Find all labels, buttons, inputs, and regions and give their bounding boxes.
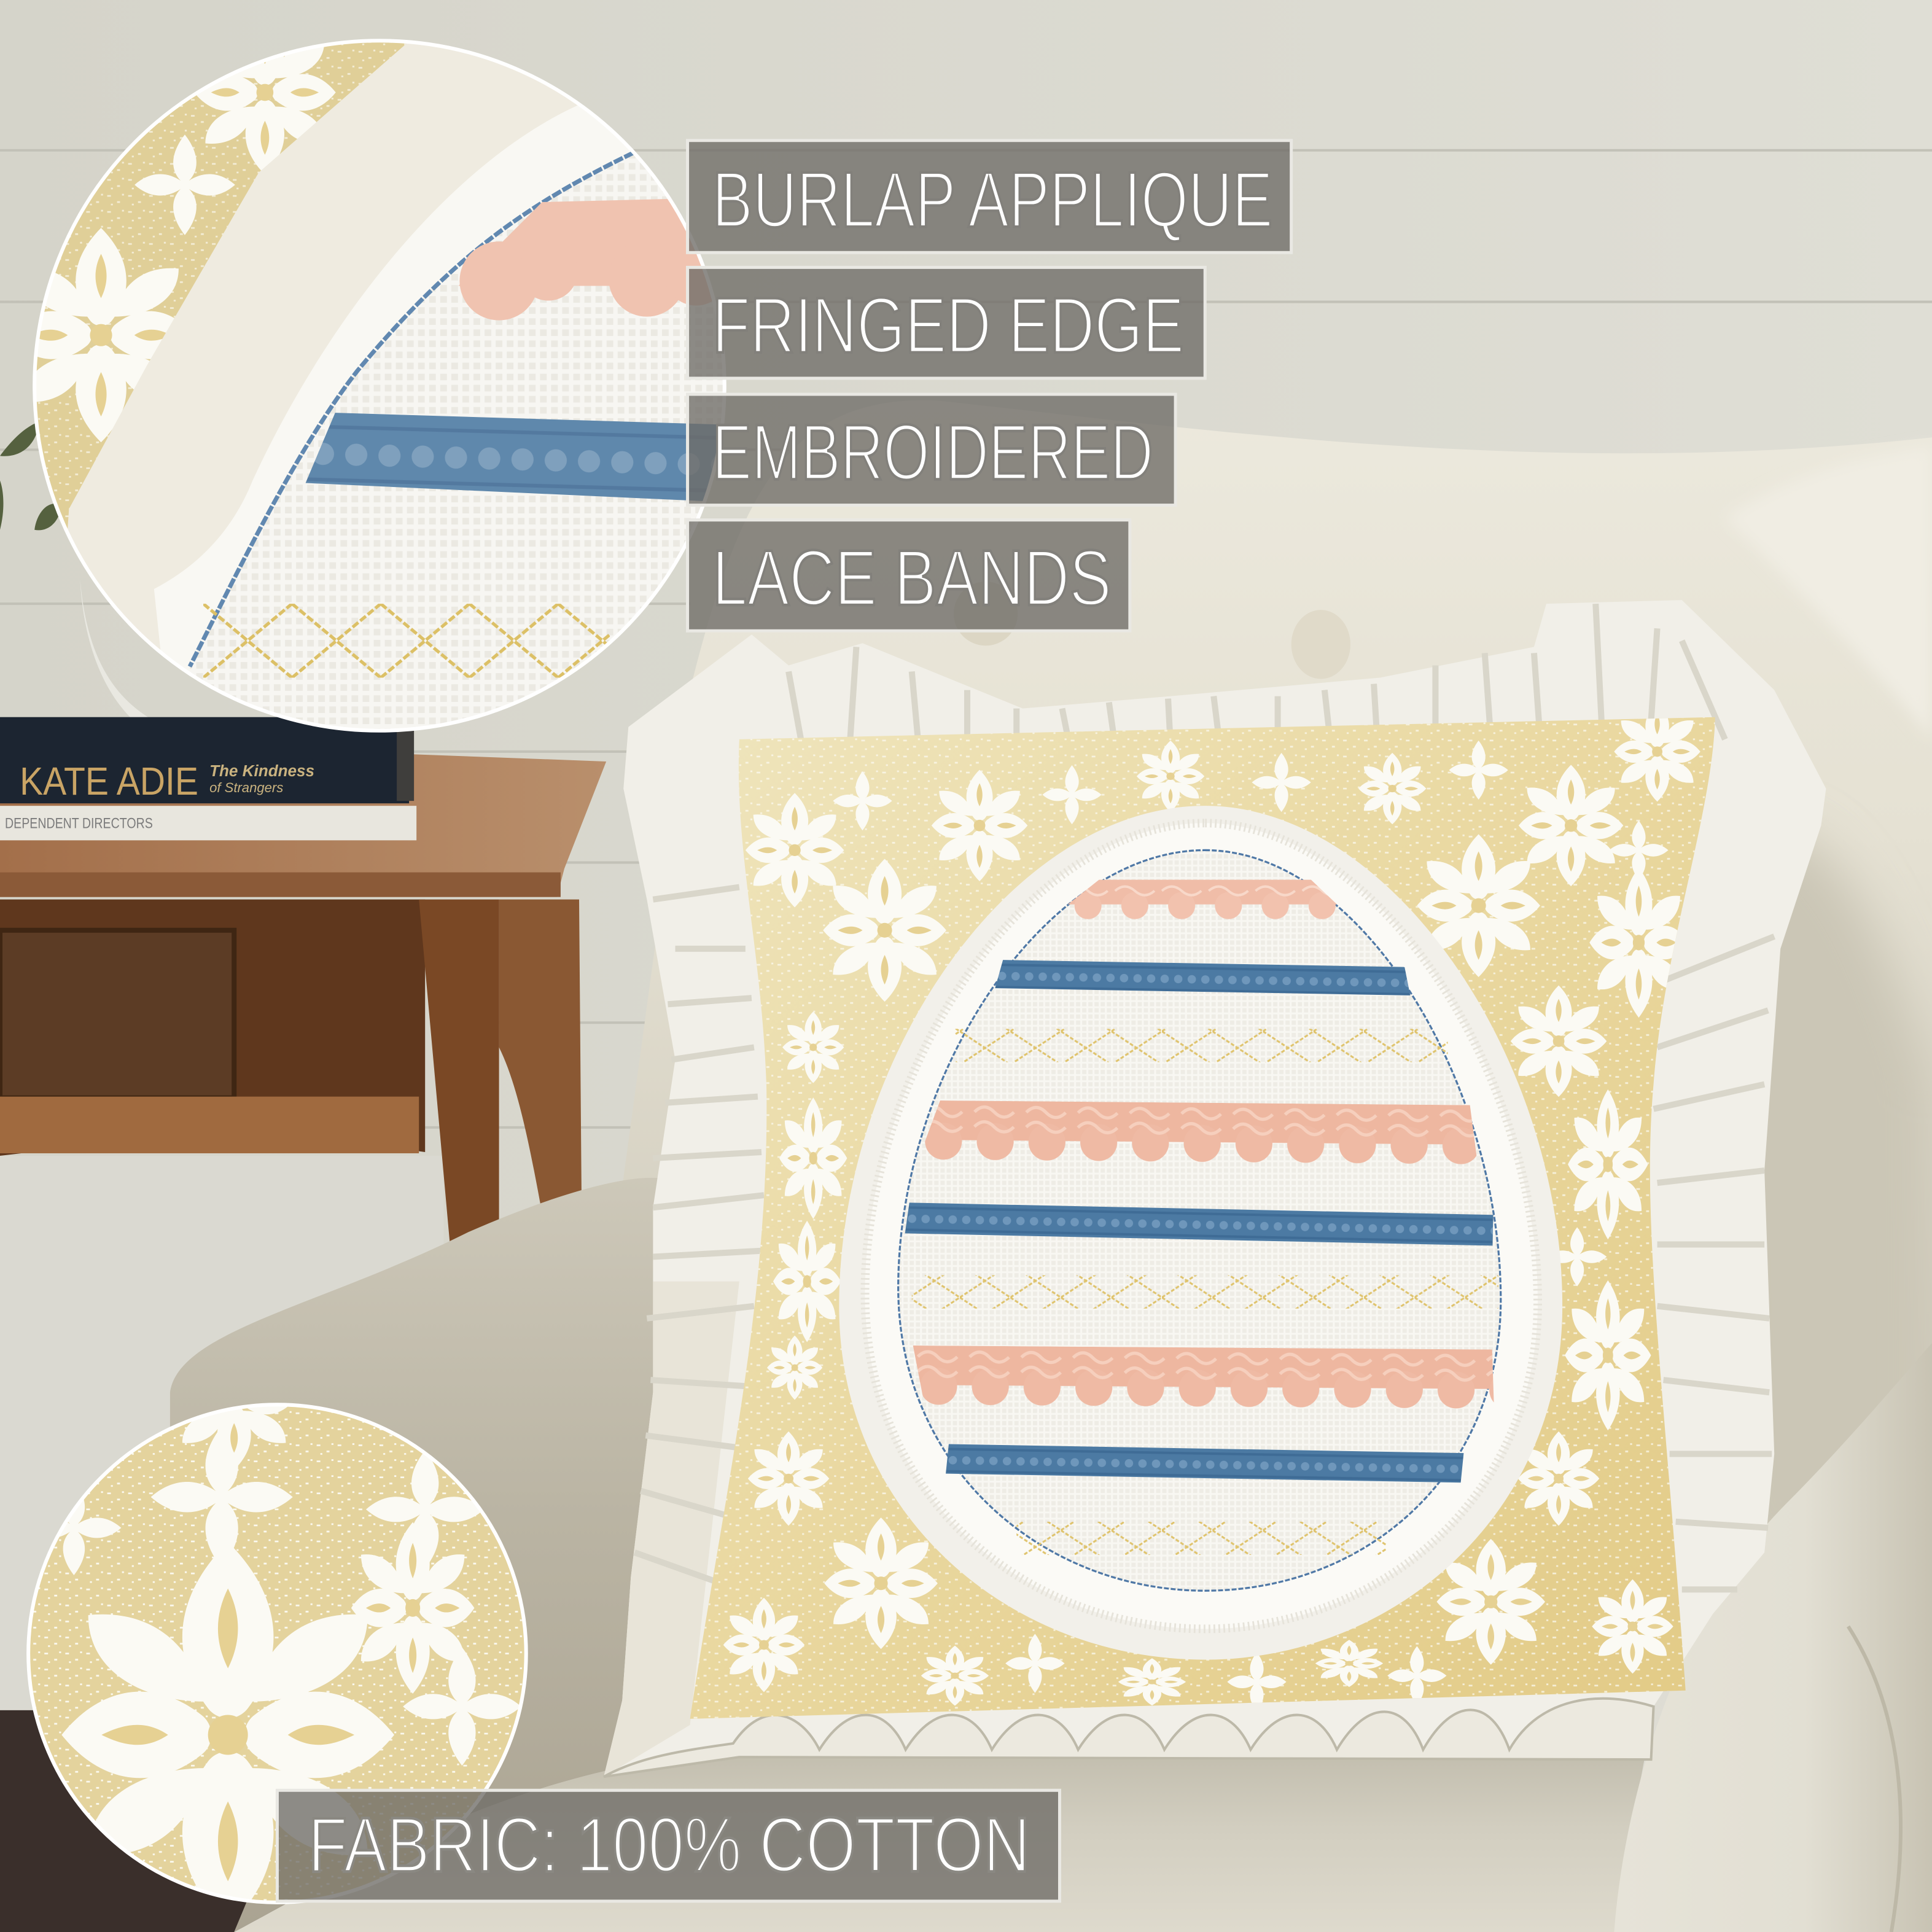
blue band 3	[946, 1444, 1463, 1482]
burlap interior	[190, 155, 722, 724]
seat	[234, 1725, 1651, 1932]
label: fabric content: FABRIC: 100% COTTON	[308, 1802, 1030, 1888]
label: fringed edge: FRINGED EDGE	[712, 282, 1184, 370]
pink lace band 3	[913, 1346, 1495, 1411]
icon: chair button 2	[1291, 610, 1350, 679]
ruffle pleats	[634, 604, 1774, 1589]
books: of Strangers	[209, 780, 283, 795]
left arm	[170, 1178, 764, 1932]
blue stitch	[190, 153, 633, 666]
damask motifs	[723, 701, 1700, 1712]
label: fabric content	[277, 1790, 1059, 1901]
chair back	[616, 400, 1932, 1479]
label: embroidered: EMBROIDERED	[712, 408, 1153, 496]
fringe band	[154, 106, 630, 672]
shaded lower-left ruffle	[604, 1282, 739, 1777]
label: lace bands: LACE BANDS	[712, 534, 1112, 622]
pink lace band 2	[917, 1100, 1479, 1167]
gold stitch 2	[912, 1276, 1498, 1309]
outer appliqué cloth	[839, 806, 1562, 1660]
gold stitch 1	[955, 1029, 1447, 1062]
drawer	[0, 930, 234, 1098]
right arm	[1614, 1343, 1932, 1932]
burlap egg	[898, 850, 1501, 1591]
books: The Kindness	[209, 762, 314, 780]
egg applique	[839, 806, 1562, 1660]
fringed edge	[865, 823, 1538, 1629]
panel: top detail circle	[33, 39, 726, 733]
label: burlap applique	[688, 141, 1291, 252]
books: KATE ADIE	[20, 759, 198, 803]
plant leaves	[0, 421, 61, 530]
pink lace zoom	[458, 197, 739, 321]
gold stitch zoom	[203, 604, 610, 678]
label: lace bands	[688, 520, 1130, 631]
blue band 1	[995, 960, 1411, 995]
label: embroidered	[688, 394, 1175, 505]
books: DEPENDENT DIRECTORS	[5, 815, 153, 832]
gold stitch 3	[1016, 1522, 1386, 1555]
lace bands	[905, 880, 1498, 1555]
panel: ruffled pillow	[604, 600, 1826, 1777]
blue band 2	[905, 1202, 1494, 1245]
label: burlap applique: BURLAP APPLIQUE	[712, 156, 1273, 244]
yellow printed pillow body	[678, 701, 1737, 1737]
icon: chair button 1	[954, 582, 1018, 645]
side table	[0, 754, 606, 1242]
books	[0, 717, 416, 840]
bottom frill	[604, 1699, 1654, 1777]
ruffle frame	[604, 600, 1826, 1777]
blue lace zoom	[306, 413, 739, 503]
vase	[80, 579, 277, 739]
applique cloth	[68, 44, 577, 650]
pink lace band 1	[1065, 880, 1358, 924]
panel: bottom fabric circle	[25, 1327, 532, 1928]
armchair	[170, 400, 1932, 1932]
label: fringed edge	[688, 267, 1205, 378]
